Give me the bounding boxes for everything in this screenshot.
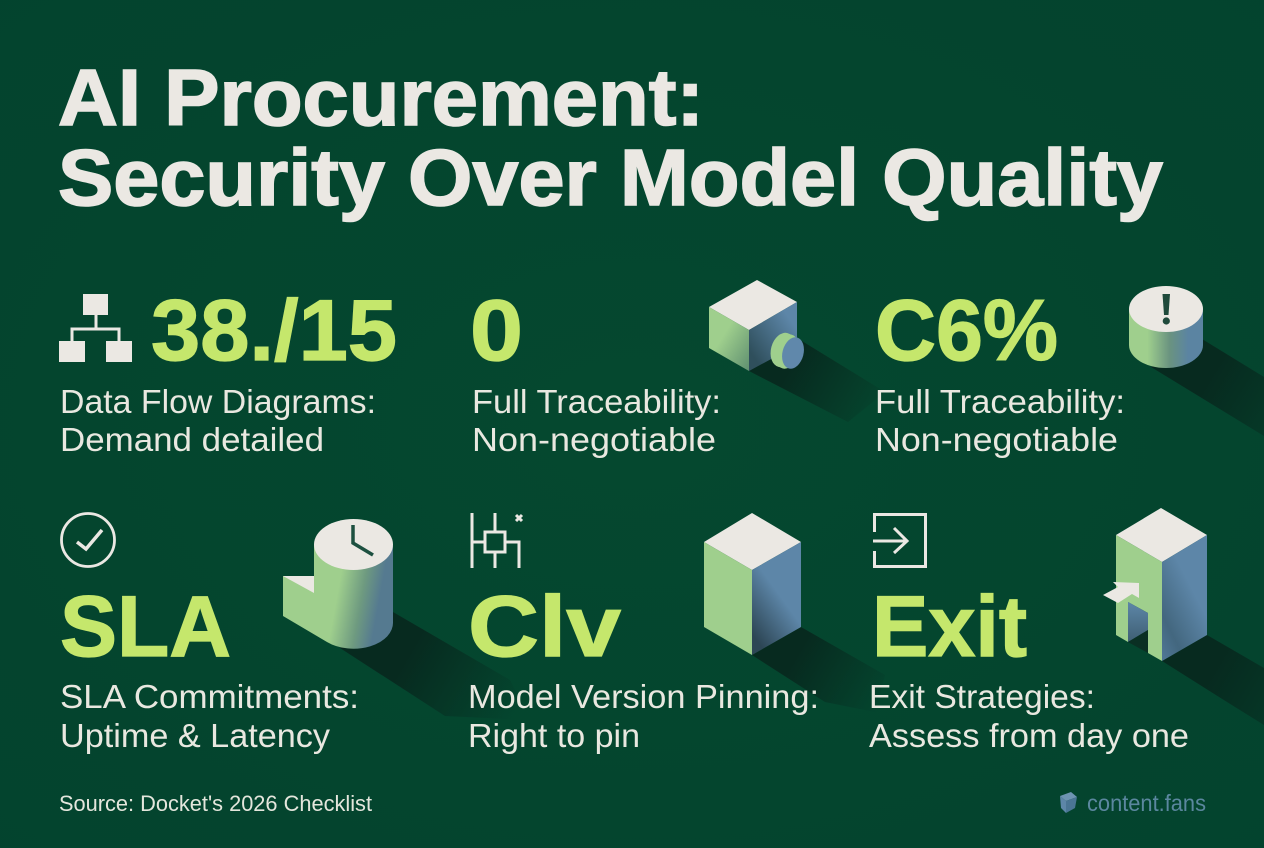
label: model version pinning xyxy=(468,678,819,754)
icon: exit door arrow xyxy=(873,514,926,566)
title xyxy=(58,53,1164,222)
panel: data flow diagrams xyxy=(59,283,397,458)
panel: full traceability 0 xyxy=(470,280,885,458)
icon: isometric tall box xyxy=(704,513,885,712)
icon: logo cube xyxy=(1060,792,1077,813)
label: model version pinning: Model Version Pinning: xyxy=(468,678,819,715)
panel: SLA commitments xyxy=(60,514,530,754)
icon: isometric clock cylinder xyxy=(283,519,530,720)
label: SLA commitments xyxy=(60,678,359,754)
panel: model version pinning xyxy=(468,513,885,754)
icon: hierarchy diagram xyxy=(59,294,132,362)
label: full traceability: Full Traceability: xyxy=(472,383,721,420)
icon: isometric cube with cylinder xyxy=(709,280,885,422)
icon: isometric building with door xyxy=(1103,508,1264,725)
label: full traceability xyxy=(472,383,721,458)
label: full traceability: Non-negotiable xyxy=(875,421,1118,458)
label: SLA commitments: Uptime & Latency xyxy=(60,717,331,754)
stat: Clv: Clv xyxy=(468,579,621,675)
label: data flow diagrams: Demand detailed xyxy=(60,421,324,458)
icon: circuit pin xyxy=(472,513,522,568)
title: Security Over Model Quality xyxy=(58,133,1164,222)
title: AI Procurement: xyxy=(58,53,704,142)
brand name: content.fans xyxy=(1087,790,1206,816)
icon: cylinder with exclamation xyxy=(1129,286,1264,436)
label: exit strategies: Assess from day one xyxy=(869,717,1189,754)
stat: 38./15: 38./15 xyxy=(151,283,397,379)
panel: exit strategies xyxy=(869,508,1264,754)
label: data flow diagrams: Data Flow Diagrams: xyxy=(60,383,376,420)
label: data flow diagrams xyxy=(60,383,376,458)
icon: check circle xyxy=(62,514,114,566)
source note: Source: Docket's 2026 Checklist xyxy=(59,791,372,816)
stat: Exit: Exit xyxy=(872,579,1027,675)
label: exit strategies: Exit Strategies: xyxy=(869,678,1095,715)
label: full traceability: Full Traceability: xyxy=(875,383,1125,420)
label: SLA commitments: SLA Commitments: xyxy=(60,678,359,715)
label: full traceability xyxy=(875,383,1125,458)
label: model version pinning: Right to pin xyxy=(468,717,640,754)
label: exit strategies xyxy=(869,678,1189,754)
brand logo xyxy=(1060,790,1206,816)
label: full traceability: Non-negotiable xyxy=(472,421,716,458)
panel: full traceability C6% xyxy=(875,283,1264,458)
stat: C6%: C6% xyxy=(875,283,1058,379)
stat: 0: 0 xyxy=(470,283,523,379)
stat: SLA: SLA xyxy=(60,579,231,675)
